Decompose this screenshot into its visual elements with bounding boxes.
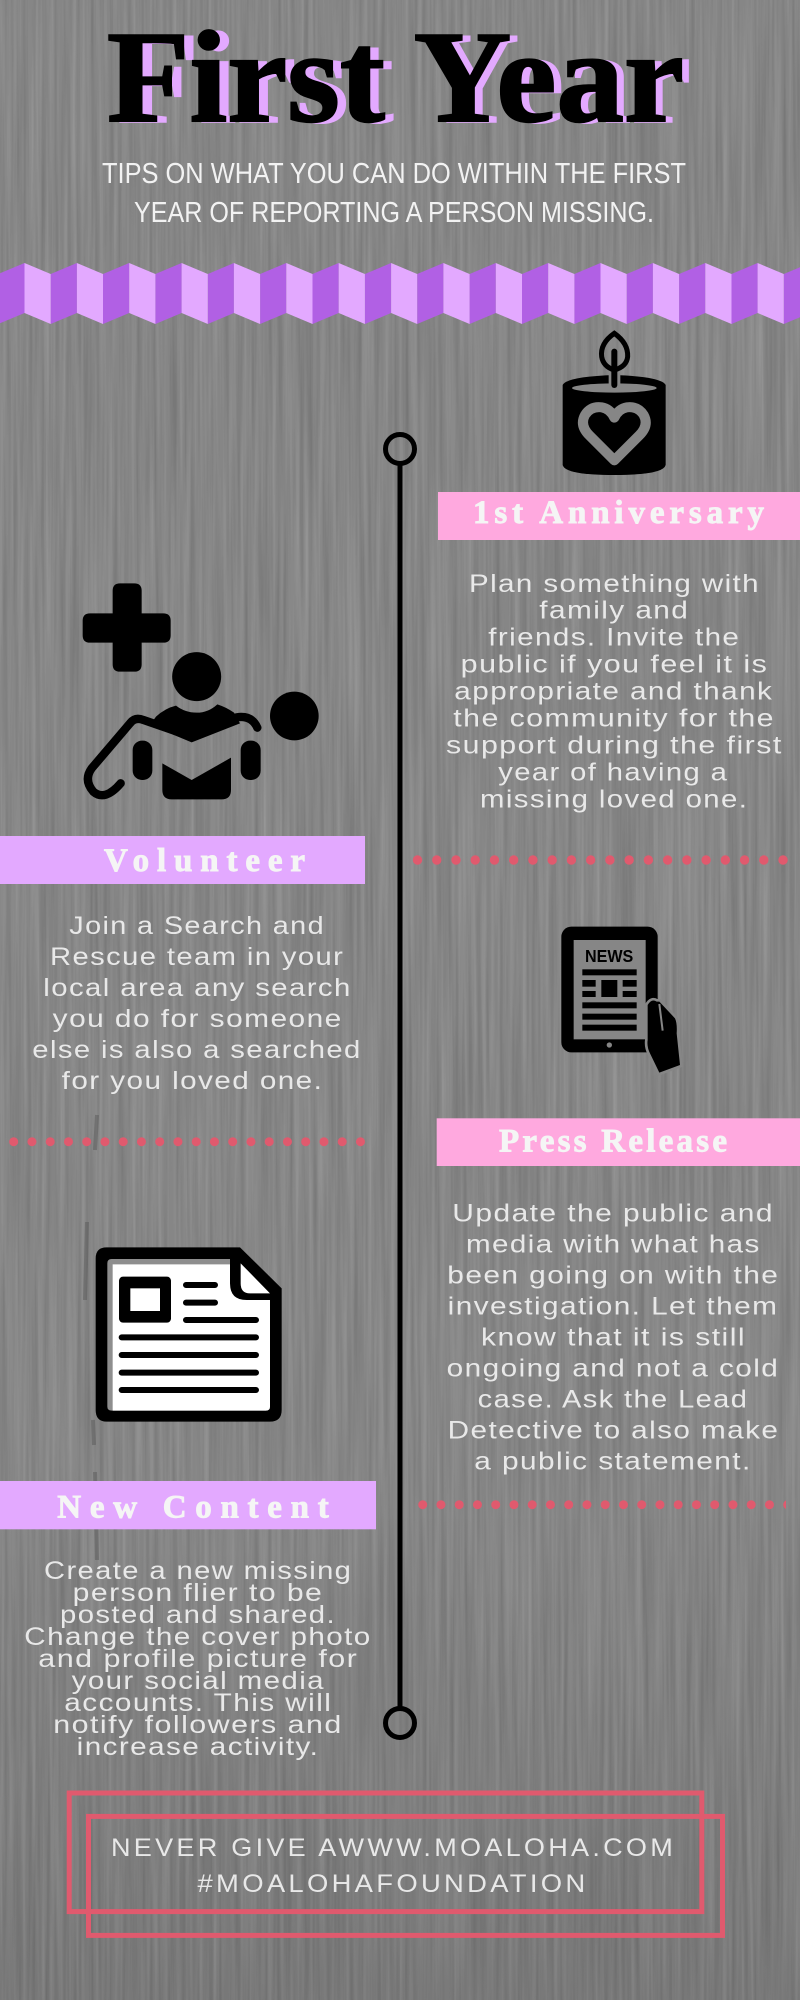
text: New Content body: accounts. This will <box>64 1689 332 1717</box>
text: 1st Anniversary body <box>446 570 783 814</box>
text: 1st Anniversary body: support during the first <box>446 732 783 760</box>
footer text <box>111 1834 676 1898</box>
text: New Content body: your social media <box>72 1667 325 1695</box>
text: Volunteer body: local area any search <box>43 974 352 1002</box>
text: Press Release body: investigation. Let them <box>448 1292 778 1320</box>
text: Press Release body <box>447 1200 779 1476</box>
text: 1st Anniversary body: family and <box>539 596 689 624</box>
title: First Year <box>117 6 691 151</box>
title: First Year <box>107 5 684 150</box>
text: Press Release body: been going on with the <box>447 1262 779 1290</box>
icon: volunteer with medical cross <box>83 583 319 799</box>
zigzag purple band <box>0 263 800 324</box>
heading: New Content: New Content <box>57 1489 331 1525</box>
footer text: #MOALOHAFOUNDATION <box>198 1870 588 1898</box>
heading: Volunteer: Volunteer <box>104 843 307 879</box>
text: 1st Anniversary body: year of having a <box>498 758 728 786</box>
text: 1st Anniversary body: Plan something with <box>469 570 760 598</box>
footer text: NEVER GIVE AWWW.MOALOHA.COM <box>111 1834 676 1862</box>
text: Press Release body: media with what has <box>466 1231 761 1259</box>
text: New Content body: Change the cover photo <box>24 1623 372 1651</box>
icon: tablet with news <box>561 927 680 1073</box>
icon: document flyer <box>96 1247 282 1422</box>
text: New Content body: Create a new missing <box>44 1557 352 1585</box>
text: Volunteer body: Rescue team in your <box>50 943 344 971</box>
subtitle <box>102 158 686 229</box>
heading: 1st Anniversary: 1st Anniversary <box>473 495 766 531</box>
text: Volunteer body: Join a Search and <box>69 912 325 940</box>
text: Volunteer body <box>32 912 362 1095</box>
timeline <box>386 434 414 1738</box>
text: New Content body: person flier to be <box>73 1579 323 1607</box>
text: New Content body <box>24 1557 372 1761</box>
heading: Press Release: Press Release <box>499 1124 729 1160</box>
text: Press Release body: case. Ask the Lead <box>478 1386 748 1414</box>
text: Volunteer body: else is also a searched <box>32 1036 362 1064</box>
icon: candle with heart <box>563 333 666 475</box>
icon: tablet with news: NEWS <box>585 946 633 966</box>
text: 1st Anniversary body: appropriate and thank <box>454 678 773 706</box>
text: Volunteer body: for you loved one. <box>62 1067 323 1095</box>
heading: 1st Anniversary <box>438 492 800 540</box>
text: New Content body: increase activity. <box>77 1733 319 1761</box>
text: Press Release body: Update the public and <box>452 1200 774 1228</box>
text: Volunteer body: you do for someone <box>53 1005 343 1033</box>
text: New Content body: posted and shared. <box>60 1601 336 1629</box>
divider: right dots 1 <box>418 855 783 865</box>
heading: Press Release <box>437 1118 800 1166</box>
footer: double frame <box>69 1793 722 1935</box>
text: Press Release body: know that it is still <box>481 1324 746 1352</box>
text: Press Release body: Detective to also make <box>448 1416 779 1444</box>
text: 1st Anniversary body: friends. Invite the <box>488 624 740 652</box>
subtitle: YEAR OF REPORTING A PERSON MISSING. <box>134 197 654 229</box>
divider: left dots <box>14 1137 361 1146</box>
heading: Volunteer <box>0 836 365 884</box>
heading: New Content <box>0 1481 376 1529</box>
text: New Content body: notify followers and <box>53 1711 343 1739</box>
text: Press Release body: ongoing and not a cold <box>447 1354 779 1382</box>
subtitle: TIPS ON WHAT YOU CAN DO WITHIN THE FIRST <box>102 158 686 190</box>
text: New Content body: and profile picture for <box>38 1645 358 1673</box>
text: 1st Anniversary body: the community for the <box>453 704 775 732</box>
text: Press Release body: a public statement. <box>474 1448 752 1476</box>
text: 1st Anniversary body: public if you feel it is <box>461 650 768 678</box>
text: 1st Anniversary body: missing loved one. <box>480 786 748 814</box>
divider: right dots 2 <box>423 1500 788 1509</box>
